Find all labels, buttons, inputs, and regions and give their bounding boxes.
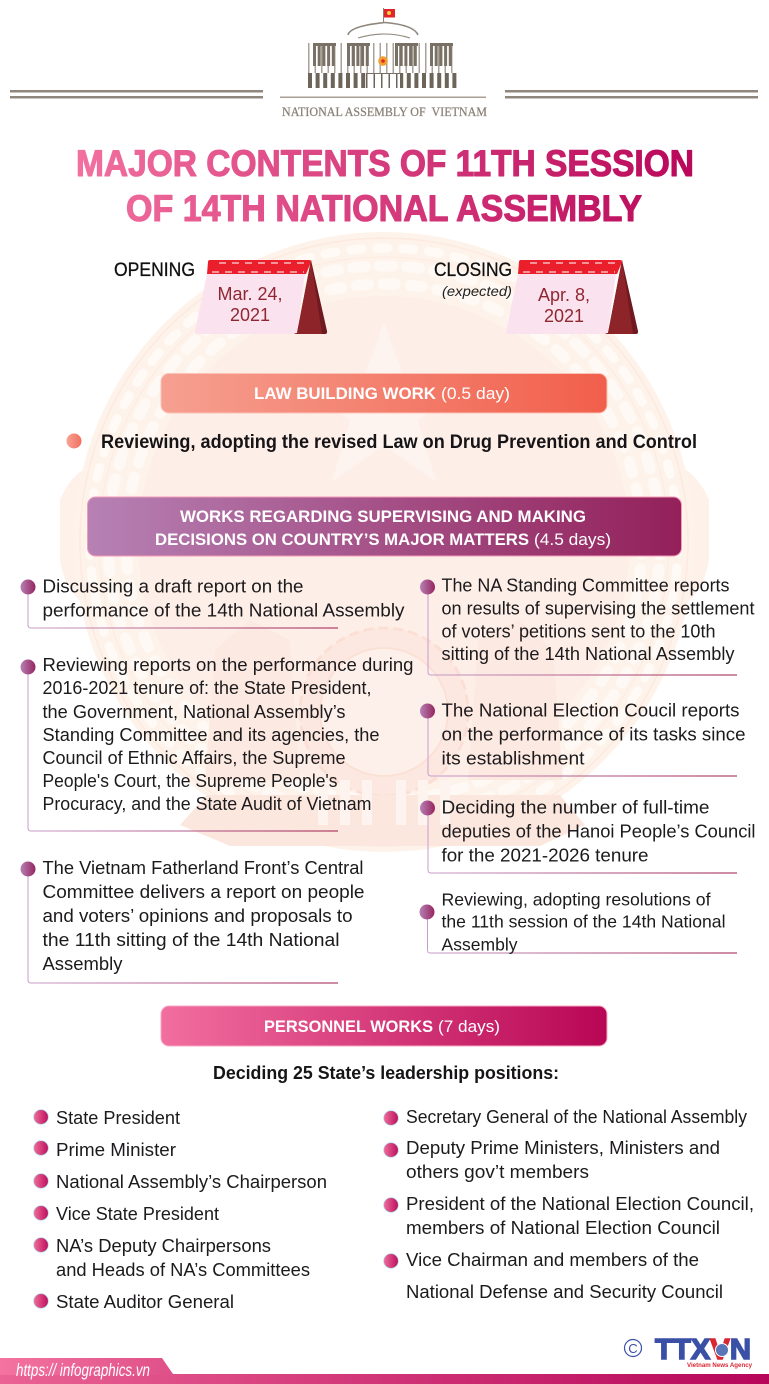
section header: personnel works: (7 days) (438, 1017, 500, 1036)
list: positions left column: NA’s Deputy Chairpersons (56, 1235, 271, 1256)
item: session resolutions: the 11th session of the 14th National (442, 912, 726, 932)
closing calendar: 2021 (544, 306, 584, 326)
item: standing committee report: The NA Standing Committee reports (442, 574, 730, 596)
closing label (434, 259, 512, 299)
item: tenure performance reports: 2016-2021 tenure of: the State President, (42, 677, 372, 698)
opening calendar: 2021 (230, 305, 270, 325)
item: hanoi council deputies: for the 2021-2026 tenure (442, 844, 648, 866)
section header: law building work (161, 374, 607, 413)
item: tenure performance reports: Standing Committee and its agencies, the (42, 724, 380, 745)
item: fatherland front report: Committee delivers a report on people (42, 881, 364, 902)
icon: copyright: C (628, 1341, 638, 1356)
header side rule: right (505, 90, 758, 98)
item: standing committee report (420, 574, 754, 675)
list: positions right column: President of the National Election Council, (406, 1193, 754, 1214)
section header: supervising and major matters (88, 497, 682, 556)
title: OF 14TH NATIONAL ASSEMBLY (126, 188, 642, 229)
item: election council report: on the performance of its tasks since (442, 724, 746, 744)
list: positions right column (384, 1106, 754, 1302)
section header: supervising and major matters: WORKS REGARDING SUPERVISING AND MAKING (180, 507, 586, 526)
opening label: OPENING (114, 259, 195, 281)
icon: flag (384, 8, 395, 23)
item: fatherland front report: and voters’ opinions and proposals to (42, 905, 352, 926)
item: fatherland front report: the 11th sitting of the 14th National (42, 929, 340, 950)
logo: National Assembly building (280, 8, 487, 119)
section header: law building work: (0.5 day) (441, 384, 510, 403)
item: hanoi council deputies (420, 796, 756, 873)
item: tenure performance reports: Reviewing reports on the performance during (42, 654, 414, 675)
opening calendar: Mar. 24, (217, 284, 283, 304)
list: positions left column: State President (56, 1107, 180, 1128)
item: tenure performance reports: Procuracy, and the State Audit of Vietnam (42, 793, 372, 814)
closing label: (expected) (442, 283, 512, 299)
footer strip (0, 1358, 769, 1384)
header side rule: left (10, 90, 263, 98)
ground line (280, 96, 486, 98)
section header: law building work: LAW BUILDING WORK (254, 384, 437, 403)
item: session resolutions: Assembly (442, 934, 518, 954)
law building item: Reviewing, adopting the revised Law on Drug Prevention and Control (101, 431, 697, 453)
list: positions left column: National Assembly’s Chairperson (56, 1171, 327, 1192)
item: draft report: performance of the 14th National Assembly (42, 600, 405, 620)
section header: supervising and major matters: DECISIONS ON COUNTRY’S MAJOR MATTERS (155, 530, 529, 549)
item: standing committee report: on results of supervising the settlement (442, 598, 754, 618)
section header: personnel works: PERSONNEL WORKS (264, 1017, 433, 1036)
item: hanoi council deputies: Deciding the number of full-time (442, 796, 710, 818)
item: session resolutions: Reviewing, adopting resolutions of (442, 890, 711, 910)
opening calendar (195, 260, 327, 334)
item: session resolutions (420, 890, 737, 954)
list: positions left column (34, 1107, 327, 1312)
organisation name: NATIONAL ASSEMBLY OF VIETNAM (282, 105, 487, 119)
list: positions left column: Prime Minister (56, 1139, 176, 1160)
list: positions right column: Vice Chairman and members of the (406, 1249, 699, 1270)
personnel subheading: Deciding 25 State’s leadership positions: (213, 1062, 559, 1083)
closing label: CLOSING (434, 259, 512, 281)
item: standing committee report: sitting of the 14th National Assembly (442, 643, 735, 664)
closing calendar (506, 260, 638, 334)
item: fatherland front report: Assembly (42, 953, 123, 974)
item: tenure performance reports: Council of Ethnic Affairs, the Supreme (42, 747, 346, 768)
section header: supervising and major matters: (4.5 days) (534, 530, 611, 549)
list: positions right column: Deputy Prime Ministers, Ministers and (406, 1137, 720, 1158)
wordmark: TTXVN (655, 1334, 751, 1366)
item: election council report: its establishment (442, 748, 584, 768)
item: election council report: The National Election Coucil reports (442, 700, 740, 720)
list: positions left column: and Heads of NA’s Committees (56, 1259, 310, 1280)
icon: dome (348, 22, 418, 38)
section header: personnel works (161, 1006, 607, 1046)
item: hanoi council deputies: deputies of the Hanoi People’s Council (442, 820, 756, 842)
item: standing committee report: of voters’ petitions sent to the 10th (442, 620, 716, 642)
footer strip: https:// infographics.vn (16, 1360, 150, 1380)
item: tenure performance reports: People's Court, the Supreme People's (42, 770, 338, 791)
title: MAJOR CONTENTS OF 11TH SESSION (76, 143, 694, 184)
item: draft report (20, 576, 405, 628)
list: positions left column: State Auditor General (56, 1291, 234, 1312)
item: fatherland front report: The Vietnam Fatherland Front’s Central (42, 857, 364, 878)
item: draft report: Discussing a draft report on the (42, 576, 304, 596)
icon: globe (716, 1344, 728, 1356)
logo: TTXVN news agency (624, 1334, 752, 1369)
icon: colonnade (308, 43, 457, 88)
item: tenure performance reports (20, 654, 414, 831)
list: positions right column: members of National Election Council (406, 1217, 720, 1238)
item: tenure performance reports: the Government, National Assembly’s (42, 701, 346, 722)
title (76, 143, 694, 229)
agency name: Vietnam News Agency (687, 1362, 752, 1369)
item: fatherland front report (20, 857, 364, 983)
list: positions left column: Vice State President (56, 1203, 219, 1224)
item: election council report (420, 700, 746, 776)
list: positions right column: National Defense and Security Council (406, 1281, 723, 1302)
list: positions right column: others gov’t members (406, 1161, 589, 1182)
list: positions right column: Secretary General of the National Assembly (406, 1106, 748, 1127)
background: national emblem watermark (60, 232, 709, 852)
closing calendar: Apr. 8, (538, 285, 590, 305)
